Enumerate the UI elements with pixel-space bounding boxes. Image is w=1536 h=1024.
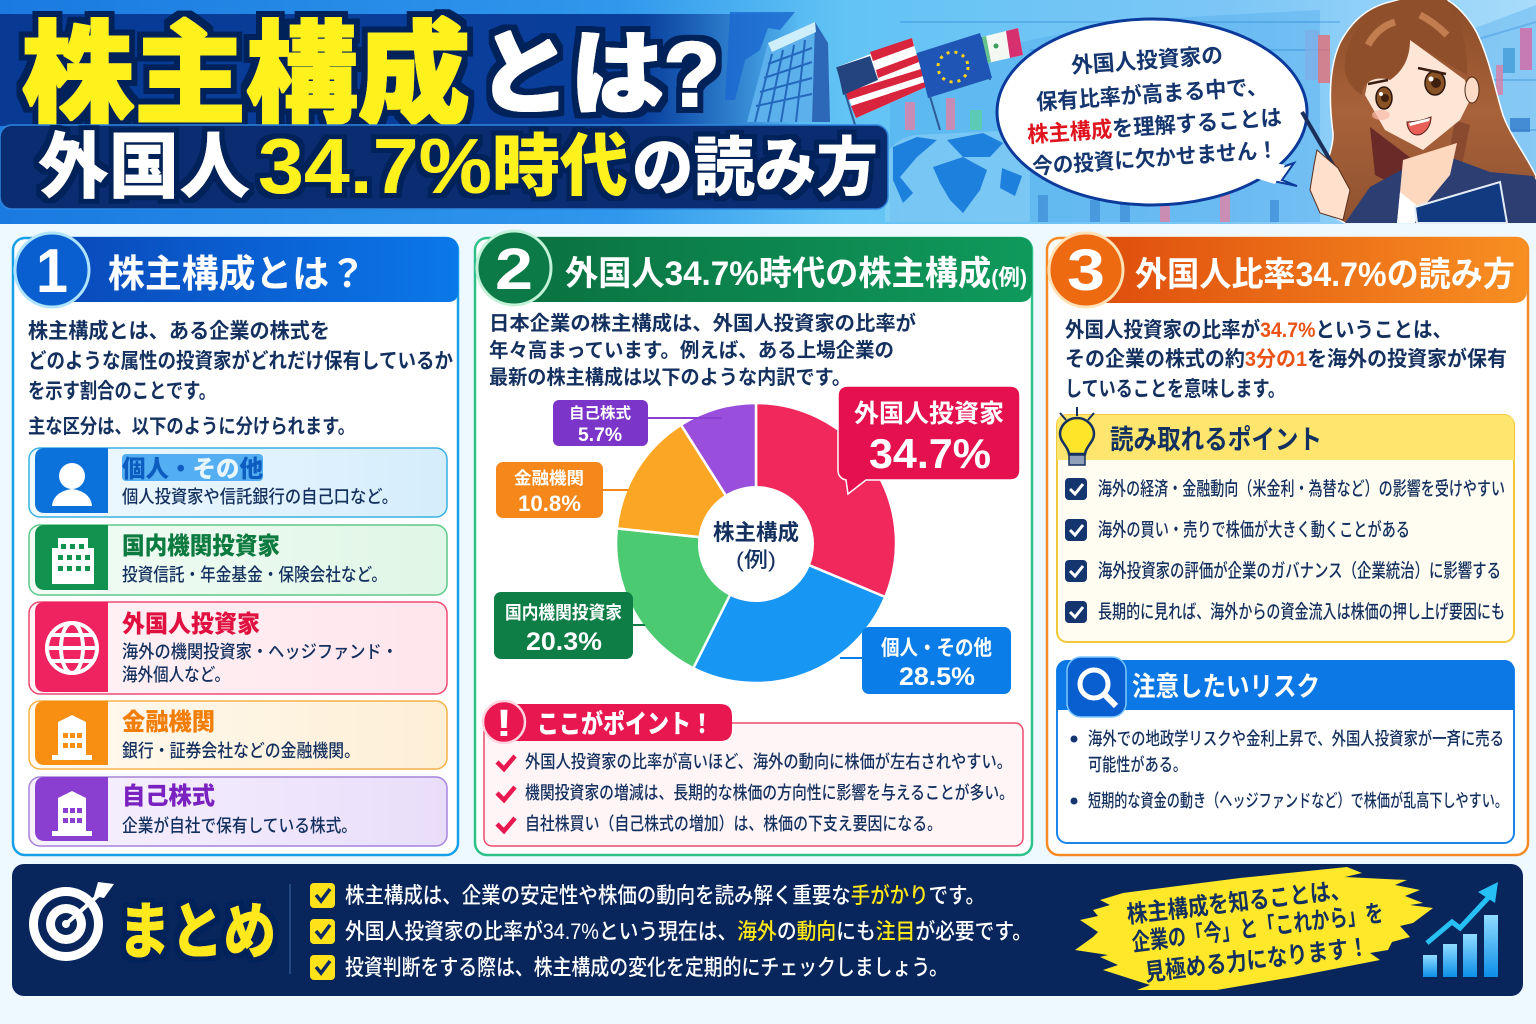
- bangs: [1345, 0, 1467, 95]
- subtitle: 34.7%: [258, 122, 492, 210]
- category: foreign investors: 海外の機関投資家・ヘッジファンド・: [122, 642, 398, 662]
- subtitle: 外国人: [38, 128, 250, 208]
- panel 3: how to read the ratio: [1047, 233, 1528, 855]
- speech bubble: [997, 19, 1307, 205]
- callout: foreign investors share: [838, 386, 1020, 494]
- checklist: [1065, 478, 1505, 623]
- panel 3 intro text: [1065, 318, 1507, 401]
- panel 1: what is shareholder composition: [13, 233, 458, 855]
- donut chart: [616, 403, 896, 683]
- jacket: [1345, 158, 1536, 223]
- panel 1 intro text: どのような属性の投資家がどれだけ保有しているか: [28, 349, 453, 373]
- icon: bank building: [52, 715, 92, 760]
- summary banner: [12, 864, 1523, 996]
- category: domestic institutions: 投資信託・年金基金・保険会社など。: [122, 565, 387, 585]
- readable points box: [1057, 407, 1514, 642]
- title: 株主構成: [22, 13, 470, 138]
- face: [1365, 40, 1470, 150]
- category: financial institutions: 金融機関: [122, 709, 215, 736]
- category: foreign investors: 海外個人など。: [122, 665, 230, 685]
- summary checklist: 株主構成は、企業の安定性や株価の動向を読み解く重要な手がかりです。: [345, 883, 985, 908]
- category: individuals and others: [29, 448, 447, 517]
- donut chart: (例): [736, 549, 776, 572]
- key points list: 機関投資家の増減は、長期的な株価の方向性に影響を与えることが多い。: [525, 782, 1014, 803]
- panel 3 intro text: その企業の株式の約3分の1を海外の投資家が保有: [1065, 347, 1507, 371]
- label: domestic institutions share: 20.3%: [526, 628, 602, 656]
- label: treasury stock share: [553, 400, 722, 446]
- readable points box: 読み取れるポイント: [1110, 425, 1322, 455]
- key points box: [483, 701, 1023, 846]
- subtitle: の読み方: [632, 132, 878, 204]
- back hair: [1320, 0, 1536, 223]
- panel 2 header: [477, 231, 1032, 305]
- icon: company building: [52, 791, 92, 836]
- risks box: [1057, 657, 1514, 843]
- subtitle: [0, 122, 888, 210]
- callout: foreign investors share: 34.7%: [869, 430, 991, 477]
- category: individuals and others: 個人投資家や信託銀行の自己口など。: [122, 487, 398, 507]
- speech bubble: 株主構成を理解することは: [1026, 105, 1283, 148]
- panel 1 intro text: 株主構成とは、ある企業の株式を: [28, 319, 330, 343]
- panel 1 intro text: [28, 319, 453, 438]
- key points heading: ここがポイント！: [537, 709, 713, 739]
- category: treasury stock: 企業が自社で保有している株式。: [122, 815, 357, 836]
- yellow brush message: 企業の「今」と「これから」を: [1130, 900, 1385, 957]
- eyes: [1368, 68, 1446, 109]
- header background: market chart, city and map: [0, 0, 1536, 224]
- donut chart: 株主構成: [713, 520, 799, 545]
- category: treasury stock: [29, 777, 447, 846]
- pen: [1302, 112, 1337, 172]
- panel 2 header: 外国人34.7%時代の株主構成(例): [565, 255, 1027, 293]
- category: financial institutions: [29, 701, 447, 769]
- checklist: 海外の買い・売りで株価が大きく動くことがある: [1098, 519, 1410, 541]
- label: financial institutions share: [496, 462, 628, 518]
- label: treasury stock share: 5.7%: [578, 425, 622, 446]
- callout: foreign investors share: 外国人投資家: [854, 400, 1004, 428]
- category: foreign investors: [29, 602, 447, 694]
- label: domestic institutions share: 国内機関投資家: [505, 603, 622, 623]
- label: individuals share: 28.5%: [899, 663, 975, 691]
- panel 2 intro text: [489, 311, 916, 389]
- key points list: [497, 751, 1014, 834]
- icon: target with arrow: [29, 882, 114, 961]
- speech bubble: 今の投資に欠かせません！: [1031, 137, 1279, 179]
- summary checklist: 投資判断をする際は、株主構成の変化を定期的にチェックしましょう。: [345, 955, 948, 980]
- panel 2 intro text: 日本企業の株主構成は、外国人投資家の比率が: [489, 311, 916, 335]
- label: treasury stock share: 自己株式: [569, 404, 631, 422]
- category: individuals and others: 個人・その他: [122, 456, 263, 483]
- icon: globe: [47, 623, 97, 673]
- blush and mouth: [1372, 110, 1390, 120]
- yellow brush message: [1075, 867, 1433, 990]
- panel 1 header: [15, 233, 458, 307]
- neck shadow: [1370, 127, 1420, 185]
- icon: magnifying glass: [1067, 657, 1126, 717]
- icon: person: [52, 463, 92, 506]
- label: individuals share: 個人・その他: [881, 637, 992, 660]
- summary heading: まとめ: [118, 898, 276, 967]
- icon: building: [52, 538, 94, 584]
- icon: light bulb: [1060, 407, 1094, 465]
- panel 3 intro text: 外国人投資家の比率が34.7%ということは、: [1065, 318, 1452, 342]
- speech bubble: 保有比率が高まる中で、: [1035, 74, 1269, 115]
- hand: [1310, 150, 1350, 220]
- category: domestic institutions: 国内機関投資家: [122, 533, 280, 560]
- label: individuals share: [840, 627, 1011, 694]
- panel 2 header: 2: [495, 237, 533, 302]
- title: [22, 13, 720, 138]
- summary checklist: [310, 883, 1032, 980]
- category: foreign investors: 外国人投資家: [122, 611, 260, 638]
- illustration: office tower: [747, 22, 830, 122]
- icon: rising bar chart: [1423, 882, 1498, 977]
- key points heading: [483, 701, 732, 745]
- label: domestic institutions share: [494, 592, 645, 659]
- key points list: 自社株買い（自己株式の増加）は、株価の下支え要因になる。: [525, 814, 942, 834]
- panel 2: composition example: [475, 231, 1032, 855]
- category: treasury stock: 自己株式: [122, 783, 215, 810]
- panel 1 intro text: 主な区分は、以下のように分けられます。: [28, 415, 355, 438]
- risks list: 可能性がある。: [1088, 754, 1187, 775]
- panel 3 header: 外国人比率34.7%の読み方: [1135, 256, 1515, 294]
- illustration: presenter woman with pen and notebook: [1302, 0, 1536, 223]
- icon: flags: [837, 28, 1023, 130]
- panel 1 intro text: を示す割合のことです。: [28, 380, 216, 403]
- subtitle: 時代: [492, 129, 628, 205]
- category: domestic institutions: [29, 525, 447, 595]
- shirt and neck: [1397, 143, 1457, 223]
- panel 1 header: 株主構成とは？: [108, 254, 366, 296]
- title: とは?: [478, 24, 720, 126]
- panel 3 intro text: していることを意味します。: [1065, 378, 1285, 401]
- key points list: 外国人投資家の比率が高いほど、海外の動向に株価が左右されやすい。: [525, 751, 1012, 772]
- label: financial institutions share: 金融機関: [514, 468, 584, 488]
- summary checklist: 外国人投資家の比率が34.7%という現在は、海外の動向にも注目が必要です。: [345, 919, 1032, 944]
- panel 2 intro text: 最新の株主構成は以下のような内訳です。: [489, 365, 851, 389]
- risks list: [1070, 728, 1508, 811]
- yellow brush message: 見極める力になります！: [1143, 934, 1370, 987]
- panel 1 header: 1: [36, 237, 68, 306]
- panel 3 header: 3: [1067, 238, 1105, 303]
- panel 3 header: [1049, 233, 1527, 307]
- yellow brush message: 株主構成を知ることは、: [1126, 877, 1352, 929]
- risks box: 注意したいリスク: [1132, 672, 1320, 702]
- category: financial institutions: 銀行・証券会社などの金融機関。: [122, 741, 360, 761]
- speech bubble: 外国人投資家の: [1070, 43, 1224, 78]
- label: financial institutions share: 10.8%: [518, 491, 581, 516]
- panel 2 intro text: 年々高まっています。例えば、ある上場企業の: [489, 339, 894, 362]
- key points heading: !: [496, 703, 512, 745]
- notebook: [1415, 182, 1507, 223]
